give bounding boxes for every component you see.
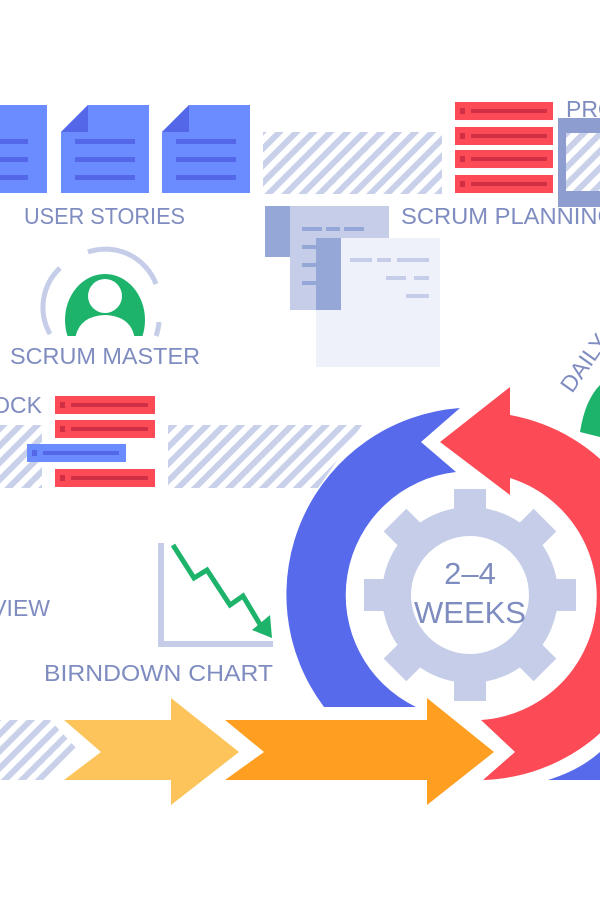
label: 2-4 weeks: 2–4 (444, 556, 496, 591)
hatched bars middle (0, 425, 362, 488)
arrows: process flow (0, 698, 494, 805)
icon: framed hatched board (558, 118, 600, 207)
cycle: red arc arrow (440, 387, 600, 780)
icon: stacked documents (265, 206, 440, 367)
icon: scrum master avatar (40, 246, 162, 337)
label: 2-4 weeks: WEEKS (414, 595, 526, 630)
hatched bar top (263, 132, 442, 194)
icon: backlog list (27, 396, 155, 487)
icon: gear (364, 489, 576, 701)
label: burndown chart: BIRNDOWN CHART (44, 660, 273, 686)
chart: burndown (161, 543, 273, 644)
label: scrum master: SCRUM MASTER (10, 343, 200, 369)
cycle: blue arc arrow (286, 408, 460, 707)
label: 2-4 weeks (414, 556, 526, 630)
icon: red task list top (455, 102, 553, 193)
decorative partial shapes right (548, 385, 600, 780)
icon: user story documents (0, 105, 250, 193)
label: user stories: USER STORIES (24, 203, 185, 229)
